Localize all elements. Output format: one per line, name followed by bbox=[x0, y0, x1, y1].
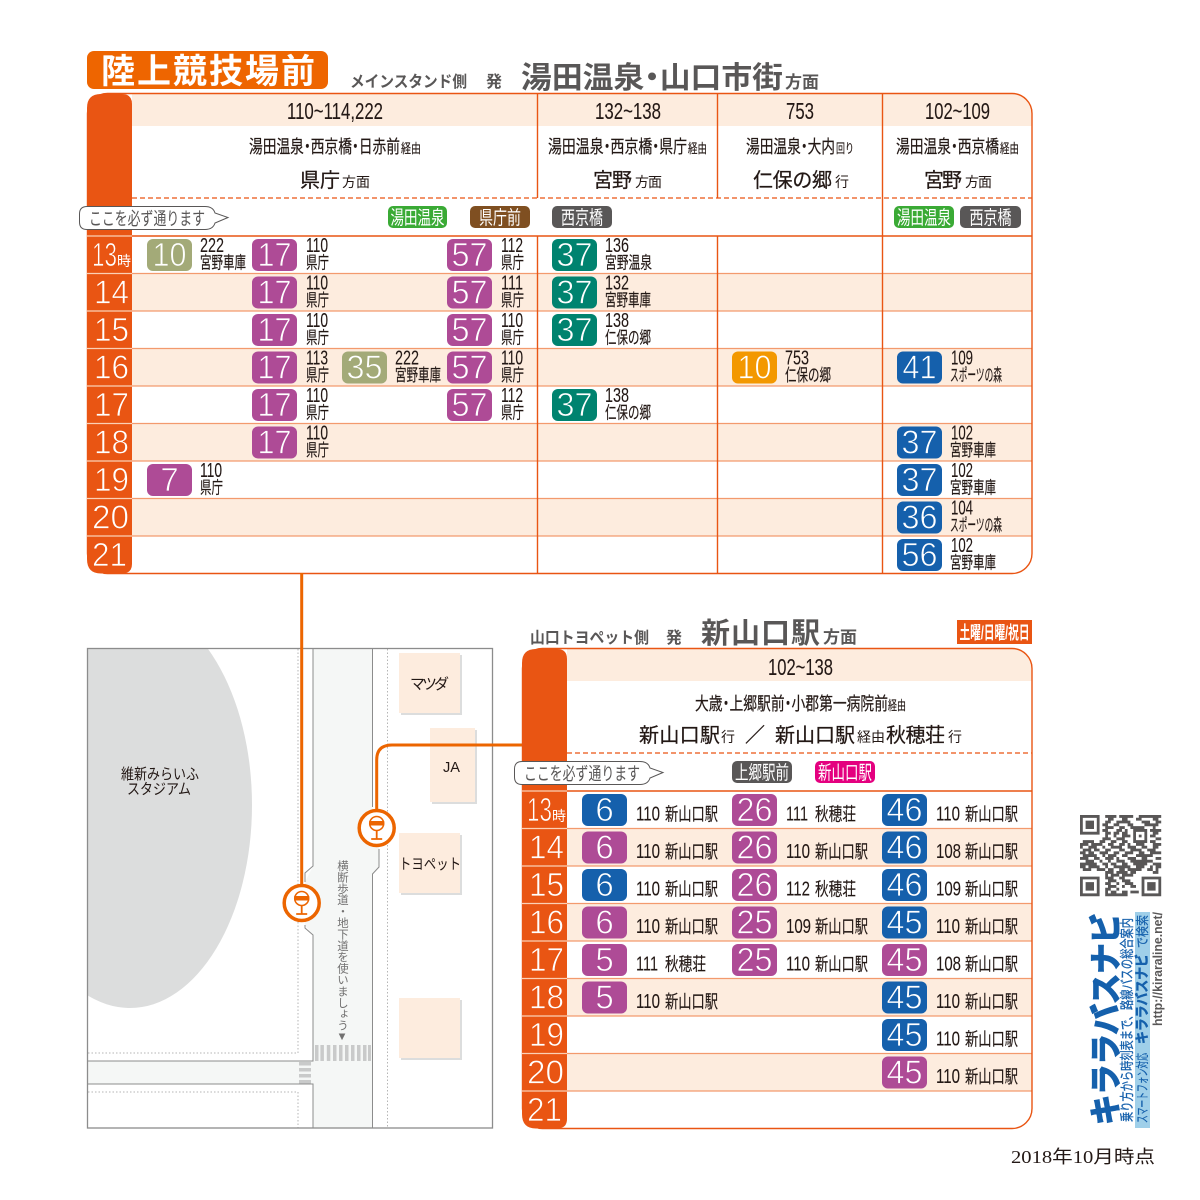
icon: bus stop 1 bbox=[284, 886, 319, 920]
13h: 26: 26 bbox=[736, 791, 772, 828]
hour column: 16 bbox=[529, 904, 564, 940]
13h: 46: 110 bbox=[936, 804, 960, 826]
15h: 26: 26 bbox=[736, 866, 772, 903]
14h: 17: 17 bbox=[258, 274, 292, 310]
15h: 46: 新山口駅 bbox=[965, 880, 1018, 900]
16h: 17: 17 bbox=[258, 348, 292, 386]
tag: 西京橋: 西京橋 bbox=[561, 207, 603, 229]
column header 102~109: 宮野 bbox=[924, 169, 962, 192]
column header 132~138 bbox=[548, 98, 707, 192]
18h: 17: 110 bbox=[306, 422, 328, 444]
13h: 6: 新山口駅 bbox=[665, 804, 718, 824]
17h: 25: 新山口駅 bbox=[815, 954, 868, 974]
15h: 26: 112 bbox=[786, 878, 810, 900]
15h: 17: 17 bbox=[258, 311, 292, 348]
14h: 57 bbox=[447, 272, 524, 310]
hour column: 時 bbox=[117, 253, 131, 269]
column header 102~109: 湯田温泉・西京橋 bbox=[896, 137, 999, 157]
16h: 35: 222 bbox=[395, 348, 419, 370]
logo: キララバスナビ vertical block bbox=[1088, 912, 1165, 1128]
17h: 37: 37 bbox=[556, 386, 592, 423]
header band bbox=[567, 649, 1032, 681]
15h: 17: 県庁 bbox=[306, 328, 329, 348]
13h: 10 bbox=[147, 235, 246, 273]
13h: 37: 宮野温泉 bbox=[605, 254, 652, 272]
18h: 37: 宮野車庫 bbox=[950, 441, 996, 460]
search hint box: スマートフォン対応 bbox=[1135, 1053, 1150, 1123]
13h: 57 bbox=[447, 235, 524, 273]
stadium label: 維新みらいふ bbox=[121, 766, 199, 783]
19h: 7 bbox=[147, 460, 223, 498]
column header 753: 753 bbox=[786, 98, 814, 124]
18h: 5: 110 bbox=[636, 991, 660, 1013]
building: トヨペット bbox=[399, 833, 462, 895]
21h: 56: 宮野車庫 bbox=[950, 554, 996, 572]
17h: 17 bbox=[252, 385, 329, 423]
17h: 37: 仁保の郷 bbox=[605, 404, 651, 422]
14h: 6: 6 bbox=[595, 828, 614, 866]
tag: 湯田温泉 (right) bbox=[894, 206, 954, 229]
18h: 37: 102 bbox=[951, 422, 973, 444]
14h: 57: 111 bbox=[501, 272, 523, 294]
14h: 26 bbox=[732, 828, 868, 866]
19h: 37: 102 bbox=[951, 460, 973, 482]
icon: bus stop 2 bbox=[359, 810, 394, 846]
16h: 57 bbox=[447, 348, 524, 386]
hour column: 16 bbox=[94, 348, 129, 386]
column header 753: 回り bbox=[836, 141, 854, 156]
13h: 57: 112 bbox=[501, 235, 523, 257]
heading: departure side and destination, main stand: 発 bbox=[486, 73, 502, 91]
17h: 17: 県庁 bbox=[306, 404, 329, 422]
QR code bbox=[1080, 816, 1161, 895]
hour column: 時 bbox=[552, 808, 566, 824]
16h: 41: 109 bbox=[951, 348, 973, 370]
column header 110~114,222: 県庁 bbox=[300, 169, 340, 192]
column header 132~138: 132~138 bbox=[595, 98, 661, 124]
tag: 上郷駅前: 上郷駅前 bbox=[735, 762, 789, 784]
title: stop name: 陸上競技場前 bbox=[101, 53, 315, 91]
18h: 17: 県庁 bbox=[306, 441, 329, 460]
14h: 37: 宮野車庫 bbox=[605, 291, 651, 310]
18h: 5: 5 bbox=[595, 978, 614, 1016]
13h: 46: 新山口駅 bbox=[965, 804, 1018, 824]
13h: 46: 46 bbox=[886, 791, 922, 828]
building: トヨペット: トヨペット bbox=[399, 856, 461, 873]
heading: departure side and destination, Toyopet: 山口トヨペット側 bbox=[530, 629, 649, 647]
16h: 10: 753 bbox=[785, 348, 809, 370]
column header 753: 仁保の郷 bbox=[753, 169, 832, 192]
14h: 37: 132 bbox=[605, 272, 629, 294]
14h: 37 bbox=[552, 272, 651, 310]
14h: 46: 108 bbox=[936, 841, 961, 863]
15h: 6: 6 bbox=[595, 866, 614, 903]
19h: 37: 37 bbox=[902, 461, 938, 498]
13h: 17: 110 bbox=[306, 235, 328, 257]
16h: 6 bbox=[582, 904, 718, 940]
14h: 57: 県庁 bbox=[501, 291, 524, 310]
17h: 25 bbox=[732, 941, 868, 978]
16h: 35: 35 bbox=[346, 348, 382, 386]
21h: 56: 56 bbox=[902, 536, 938, 573]
13h: 6 bbox=[582, 791, 718, 828]
column header 102~138: 行 bbox=[948, 729, 962, 745]
20h: 36 bbox=[897, 498, 1002, 536]
heading: departure side and destination, Toyopet: 新山口駅 bbox=[701, 617, 820, 650]
badge: 土曜/日曜/祝日 bbox=[957, 620, 1032, 644]
16h: 25: 新山口駅 bbox=[815, 917, 868, 937]
column header 132~138: 方面 bbox=[635, 174, 662, 190]
20h: 45: 新山口駅 bbox=[965, 1067, 1018, 1087]
heading: departure side and destination, Toyopet bbox=[530, 617, 857, 650]
18h: 17 bbox=[252, 422, 329, 460]
hour column bbox=[522, 649, 567, 1128]
14h: 6: 110 bbox=[636, 841, 660, 863]
column header 132~138: 宮野 bbox=[593, 169, 632, 192]
17h: 45: 45 bbox=[886, 941, 922, 978]
17h: 57: 57 bbox=[452, 386, 488, 423]
heading: departure side and destination, main stand: メインスタンド側 bbox=[350, 73, 467, 91]
connector: lower table to stop bbox=[377, 745, 522, 812]
15h: 6: 110 bbox=[636, 878, 660, 900]
column header 102~138: ／ bbox=[745, 725, 765, 747]
tag: 湯田温泉: 湯田温泉 bbox=[390, 207, 444, 229]
13h: 10: 10 bbox=[152, 236, 186, 273]
tag: 上郷駅前 bbox=[732, 761, 792, 784]
column header 102~109: 方面 bbox=[965, 174, 992, 190]
stadium label bbox=[121, 766, 199, 798]
tag: 西京橋 (right): 西京橋 bbox=[970, 207, 1012, 229]
14h: 46: 46 bbox=[886, 828, 922, 866]
15h: 57 bbox=[447, 310, 524, 348]
16h: 25: 25 bbox=[736, 904, 772, 940]
16h: 35 bbox=[342, 348, 441, 386]
outer border bbox=[522, 648, 1032, 1128]
column header 102~138 bbox=[639, 654, 962, 747]
column header 102~138: 大歳・上郷駅前・小郡第一病院前 bbox=[695, 694, 888, 714]
roads bbox=[88, 649, 379, 1128]
17h: 5: 111 bbox=[636, 954, 658, 976]
date note: 2018年10月時点 bbox=[1011, 1147, 1155, 1167]
heading: departure side and destination, main stand bbox=[350, 62, 819, 95]
hour column: 13 bbox=[527, 791, 552, 828]
15h: 57: 110 bbox=[501, 310, 523, 332]
13h: 46 bbox=[882, 791, 1018, 828]
13h: 17: 県庁 bbox=[306, 254, 329, 272]
13h: 26: 秋穂荘 bbox=[815, 804, 856, 824]
15h: 17: 110 bbox=[306, 310, 328, 332]
14h: 17: 県庁 bbox=[306, 291, 329, 310]
outer border bbox=[88, 94, 1032, 574]
19h: 45: 110 bbox=[936, 1028, 960, 1050]
15h: 6: 新山口駅 bbox=[665, 880, 718, 900]
column header 110~114,222: 方面 bbox=[342, 174, 370, 190]
search hint box: で検索 bbox=[1135, 915, 1150, 948]
column header 753: 行 bbox=[835, 174, 849, 190]
stadium label: スタジアム bbox=[127, 781, 191, 798]
heading: departure side and destination, Toyopet: 発 bbox=[666, 629, 682, 647]
logo wordmark: キララバスナビ bbox=[1088, 913, 1124, 1125]
column header 110~114,222: 110~114,222 bbox=[287, 98, 383, 124]
building: マツダ: マツダ bbox=[410, 676, 449, 693]
18h: 37: 37 bbox=[902, 424, 938, 460]
hour column: 21 bbox=[527, 1091, 562, 1128]
20h: 45: 45 bbox=[886, 1054, 922, 1090]
hour column: 20 bbox=[92, 498, 129, 536]
13h: 37 bbox=[552, 235, 652, 273]
column header 132~138: 経由 bbox=[688, 141, 707, 156]
column header 102~138: 行 bbox=[721, 729, 735, 745]
19h: 7: 110 bbox=[200, 460, 222, 482]
13h: 57: 県庁 bbox=[501, 254, 524, 272]
17h: 5: 秋穂荘 bbox=[665, 954, 706, 974]
20h: 45 bbox=[882, 1054, 1018, 1090]
15h: 37: 138 bbox=[605, 310, 629, 332]
16h: 17: 県庁 bbox=[306, 366, 329, 385]
14h: 26: 110 bbox=[786, 841, 810, 863]
hour column bbox=[87, 94, 132, 574]
19h: 37: 宮野車庫 bbox=[950, 478, 996, 498]
19h: 45 bbox=[882, 1016, 1018, 1053]
hour column: 15 bbox=[529, 866, 564, 903]
url: http://kiraraline.net/ bbox=[1150, 912, 1165, 1026]
hour column: 14 bbox=[529, 828, 564, 866]
16h: 57: 110 bbox=[501, 348, 523, 370]
17h: 57 bbox=[447, 385, 524, 423]
16h: 57: 県庁 bbox=[501, 366, 524, 385]
18h: 17: 17 bbox=[258, 424, 292, 460]
panel: upper timetable bbox=[80, 94, 1032, 574]
heading: departure side and destination, Toyopet: 方面 bbox=[823, 627, 857, 647]
hour column: 17 bbox=[94, 386, 129, 423]
20h: 36: 104 bbox=[951, 498, 973, 520]
16h: 17 bbox=[252, 348, 329, 386]
13h: 26 bbox=[732, 791, 856, 828]
14h: 17: 110 bbox=[306, 272, 328, 294]
column header 102~138: 新山口駅 bbox=[639, 724, 720, 747]
15h: 57: 57 bbox=[452, 311, 488, 348]
13h: 6: 6 bbox=[595, 791, 614, 828]
13h: 57: 57 bbox=[452, 236, 488, 273]
callout: ここを必ず通ります: ここを必ず通ります bbox=[89, 209, 205, 229]
19h: 7: 7 bbox=[160, 461, 179, 498]
14h: 46: 新山口駅 bbox=[965, 842, 1018, 862]
13h: 10: 宮野車庫 bbox=[200, 254, 246, 272]
stadium bbox=[88, 649, 252, 1008]
14h: 17 bbox=[252, 272, 329, 310]
hour column: 19 bbox=[94, 461, 129, 498]
17h: 45: 108 bbox=[936, 954, 961, 976]
13h: 26: 111 bbox=[786, 804, 808, 826]
17h: 5 bbox=[582, 941, 706, 978]
hour column: 15 bbox=[94, 311, 129, 348]
18h: 45: 110 bbox=[936, 991, 960, 1013]
tag: 新山口駅: 新山口駅 bbox=[818, 762, 872, 784]
hour column: 18 bbox=[94, 424, 129, 460]
19h: 7: 県庁 bbox=[200, 478, 223, 498]
13h: 17 bbox=[252, 235, 329, 273]
17h: 45 bbox=[882, 941, 1018, 978]
18h: 45: 45 bbox=[886, 978, 922, 1016]
19h: 37 bbox=[897, 460, 996, 498]
17h: 17: 17 bbox=[258, 386, 292, 423]
17h: 25: 25 bbox=[736, 941, 772, 978]
15h: 26: 秋穂荘 bbox=[815, 880, 856, 900]
17h: 45: 新山口駅 bbox=[965, 954, 1018, 974]
13h: 37: 37 bbox=[556, 236, 592, 273]
building: JA: JA bbox=[443, 759, 460, 776]
heading: departure side and destination, main stand: 湯田温泉・山口市街 bbox=[521, 62, 783, 95]
16h: 41 bbox=[897, 348, 1002, 386]
16h: 10: 10 bbox=[738, 348, 772, 386]
tag: 湯田温泉 bbox=[388, 206, 447, 229]
crosswalks bbox=[299, 1045, 371, 1084]
16h: 41: 41 bbox=[902, 348, 936, 386]
17h: 57: 112 bbox=[501, 385, 523, 407]
hour column: 21 bbox=[92, 536, 127, 573]
17h: 5: 5 bbox=[595, 941, 614, 978]
16h: 41: スポーツの森 bbox=[950, 366, 1002, 385]
column header 102~109 bbox=[896, 98, 1019, 192]
14h: 46 bbox=[882, 828, 1018, 866]
building: unnamed bbox=[399, 998, 462, 1060]
column header 110~114,222: 湯田温泉・西京橋・日赤前 bbox=[249, 137, 400, 157]
16h: 35: 宮野車庫 bbox=[395, 366, 441, 385]
18h: 5: 新山口駅 bbox=[665, 992, 718, 1012]
header band bbox=[132, 94, 1032, 126]
17h: 37 bbox=[552, 385, 651, 423]
connector: upper table to stop bbox=[300, 573, 303, 887]
search hint box: キララバスナビ bbox=[1134, 954, 1150, 1044]
16h: 25: 109 bbox=[786, 916, 811, 938]
tag: 湯田温泉 (right): 湯田温泉 bbox=[897, 207, 951, 229]
16h: 6: 新山口駅 bbox=[665, 917, 718, 937]
20h: 45: 110 bbox=[936, 1066, 960, 1088]
search hint box bbox=[1134, 912, 1150, 1128]
21h: 56 bbox=[897, 535, 996, 573]
19h: 45: 新山口駅 bbox=[965, 1030, 1018, 1050]
15h: 57: 県庁 bbox=[501, 328, 524, 348]
15h: 46: 109 bbox=[936, 878, 961, 900]
column header 102~109: 102~109 bbox=[925, 98, 990, 124]
18h: 45: 新山口駅 bbox=[965, 992, 1018, 1012]
hour column: 13 bbox=[92, 236, 117, 273]
19h: 45: 45 bbox=[886, 1016, 922, 1053]
hour column: 20 bbox=[527, 1054, 564, 1090]
16h: 57: 57 bbox=[452, 348, 488, 386]
13h: 17: 17 bbox=[258, 236, 292, 273]
13h: 10: 222 bbox=[200, 235, 224, 257]
hour column: 14 bbox=[94, 274, 129, 310]
18h: 45 bbox=[882, 978, 1018, 1016]
14h: 6 bbox=[582, 828, 718, 866]
15h: 26 bbox=[732, 866, 856, 903]
15h: 37 bbox=[552, 310, 651, 348]
tag: 県庁前: 県庁前 bbox=[479, 207, 521, 229]
16h: 25 bbox=[732, 904, 868, 940]
heading: departure side and destination, main stand: 方面 bbox=[785, 72, 819, 92]
13h: 6: 110 bbox=[636, 804, 660, 826]
column header 110~114,222 bbox=[249, 98, 421, 192]
building: マツダ bbox=[399, 653, 462, 715]
15h: 37: 37 bbox=[556, 311, 592, 348]
16h: 45: 45 bbox=[886, 904, 922, 940]
17h: 25: 110 bbox=[786, 954, 810, 976]
column header 753 bbox=[746, 98, 854, 192]
callout: ここを必ず通ります: ここを必ず通ります bbox=[524, 764, 640, 784]
column header 110~114,222: 経由 bbox=[401, 141, 421, 156]
14h: 26: 新山口駅 bbox=[815, 842, 868, 862]
16h: 45: 新山口駅 bbox=[965, 917, 1018, 937]
17h: 57: 県庁 bbox=[501, 404, 524, 422]
16h: 10 bbox=[732, 348, 831, 386]
column header 753: 湯田温泉・大内 bbox=[746, 137, 835, 157]
15h: 46: 46 bbox=[886, 866, 922, 903]
badge: 土曜/日曜/祝日: 土曜/日曜/祝日 bbox=[960, 623, 1030, 643]
15h: 46 bbox=[882, 866, 1018, 903]
16h: 6: 6 bbox=[595, 904, 614, 940]
21h: 56: 102 bbox=[951, 535, 973, 557]
16h: 17: 113 bbox=[306, 348, 328, 370]
15h: 6 bbox=[582, 866, 718, 903]
17h: 17: 110 bbox=[306, 385, 328, 407]
15h: 17 bbox=[252, 310, 329, 348]
13h: 37: 136 bbox=[605, 235, 629, 257]
18h: 37 bbox=[897, 422, 996, 460]
14h: 26: 26 bbox=[736, 828, 772, 866]
map bbox=[86, 648, 494, 1129]
tagline: 乗り方から時刻表まで、路線バスの総合案内 bbox=[1119, 918, 1135, 1122]
building: JA bbox=[430, 728, 477, 804]
column header 132~138: 湯田温泉・西京橋・県庁 bbox=[548, 137, 687, 157]
panel: lower timetable bbox=[514, 648, 1032, 1128]
column header 102~138: 新山口駅 bbox=[775, 724, 855, 747]
16h: 6: 110 bbox=[636, 916, 660, 938]
15h: 37: 仁保の郷 bbox=[605, 328, 651, 348]
hour column: 19 bbox=[529, 1016, 564, 1053]
14h: 37: 37 bbox=[556, 274, 592, 310]
tag: 新山口駅 bbox=[815, 761, 875, 784]
18h: 5 bbox=[582, 978, 718, 1016]
17h: 37: 138 bbox=[605, 385, 629, 407]
20h: 36: 36 bbox=[902, 498, 938, 536]
column header 102~138: 102~138 bbox=[768, 654, 833, 680]
20h: 36: スポーツの森 bbox=[950, 516, 1002, 535]
14h: 57: 57 bbox=[452, 274, 488, 310]
16h: 45: 110 bbox=[936, 916, 960, 938]
16h: 45 bbox=[882, 904, 1018, 940]
14h: 6: 新山口駅 bbox=[665, 842, 718, 862]
column header 102~138: 秋穂荘 bbox=[886, 724, 945, 747]
column header 102~109: 経由 bbox=[1000, 141, 1019, 156]
vertical note: 横断歩道・地下道を使いましょう▼ bbox=[336, 859, 349, 1043]
16h: 10: 仁保の郷 bbox=[785, 366, 831, 385]
hour column: 17 bbox=[529, 941, 564, 978]
column header 102~138: 経由 bbox=[888, 698, 906, 713]
hour column: 18 bbox=[529, 978, 564, 1016]
column header 102~138: 経由 bbox=[857, 729, 885, 745]
